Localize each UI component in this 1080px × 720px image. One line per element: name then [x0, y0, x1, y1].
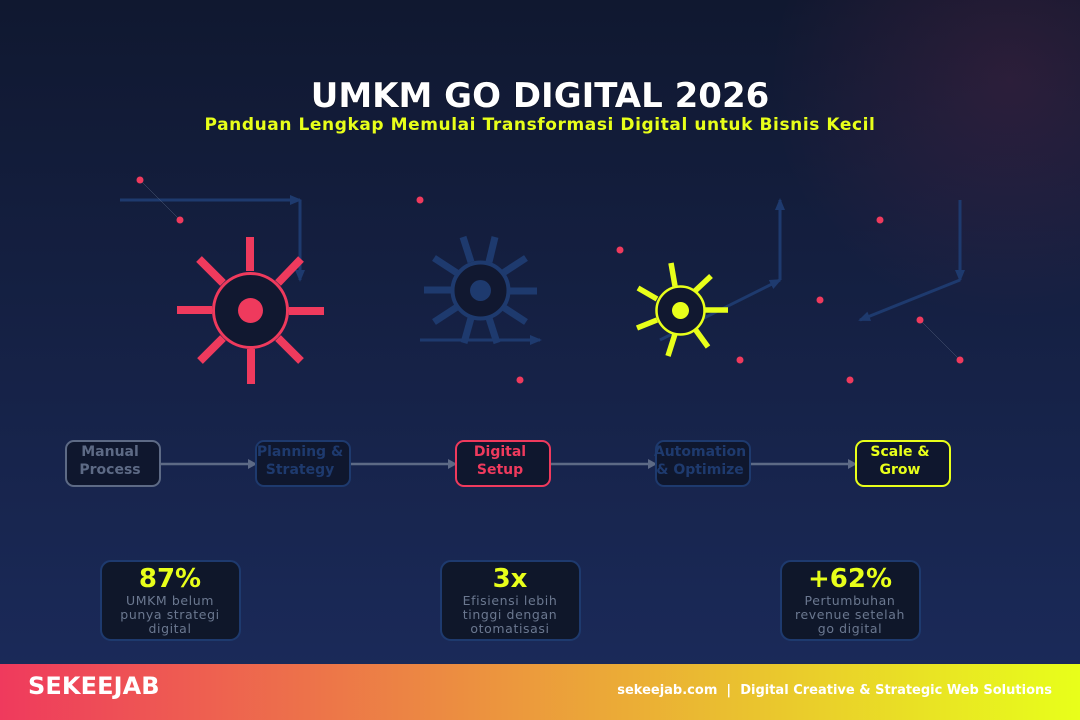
footer bar [0, 664, 1080, 720]
flow step: Manual Process [66, 441, 160, 486]
flow step: Digital Setup: Digital [474, 444, 526, 460]
flow step: Scale & Grow: Scale & [870, 444, 930, 460]
stat card: 87%: 87% [139, 564, 201, 594]
stat card: +62%: revenue setelah [795, 607, 905, 622]
arrow: rising elbow [660, 200, 780, 340]
footer brand: SEKEEJAB [28, 672, 160, 700]
flow step: Digital Setup [456, 441, 550, 486]
icon: blue gear [424, 237, 537, 343]
flow step: Planning & Strategy: Planning & [257, 444, 343, 460]
arrow: falling elbow [860, 200, 960, 320]
stat card: +62%: go digital [818, 621, 882, 636]
stat card: 3x: 3x [493, 564, 528, 594]
flow step: Automation & Optimize [654, 441, 750, 486]
flow step: Automation & Optimize: Automation [654, 444, 746, 460]
stat card: 87%: digital [148, 621, 192, 636]
icon: yellow gear [637, 263, 728, 356]
stat card: 87% [101, 561, 240, 640]
stat card: +62%: +62% [808, 564, 892, 594]
flow step: Scale & Grow: Grow [880, 462, 921, 478]
footer tagline: sekeejab.com | Digital Creative & Strategic Web Solutions [617, 683, 1052, 698]
arrow: top left elbow [120, 200, 300, 280]
flow step: Digital Setup: Setup [477, 462, 523, 478]
stat card: 3x [441, 561, 580, 640]
flow step: Manual Process: Manual [81, 444, 139, 460]
flow step: Scale & Grow [856, 441, 950, 486]
flow connector arrows [160, 463, 856, 465]
stat card: 3x: tinggi dengan [463, 607, 557, 622]
stat card: 3x: otomatisasi [470, 621, 550, 636]
stat card: 87%: UMKM belum [126, 593, 214, 608]
network dots [136, 176, 964, 384]
arrow: horizontal centre [420, 338, 540, 342]
flow step: Planning & Strategy: Strategy [266, 462, 334, 478]
stat card: 3x: Efisiensi lebih [463, 593, 557, 608]
stat card: +62%: Pertumbuhan [805, 593, 895, 608]
flow step: Automation & Optimize: & Optimize [656, 462, 744, 478]
icon: red gear [177, 237, 324, 384]
stat card: 87%: punya strategi [120, 607, 220, 622]
flow step: Planning & Strategy [256, 441, 350, 486]
flow step: Manual Process: Process [79, 462, 141, 478]
title: UMKM GO DIGITAL 2026 [311, 76, 769, 116]
subtitle: Panduan Lengkap Memulai Transformasi Digital untuk Bisnis Kecil [205, 115, 875, 135]
stat card: +62% [781, 561, 920, 640]
